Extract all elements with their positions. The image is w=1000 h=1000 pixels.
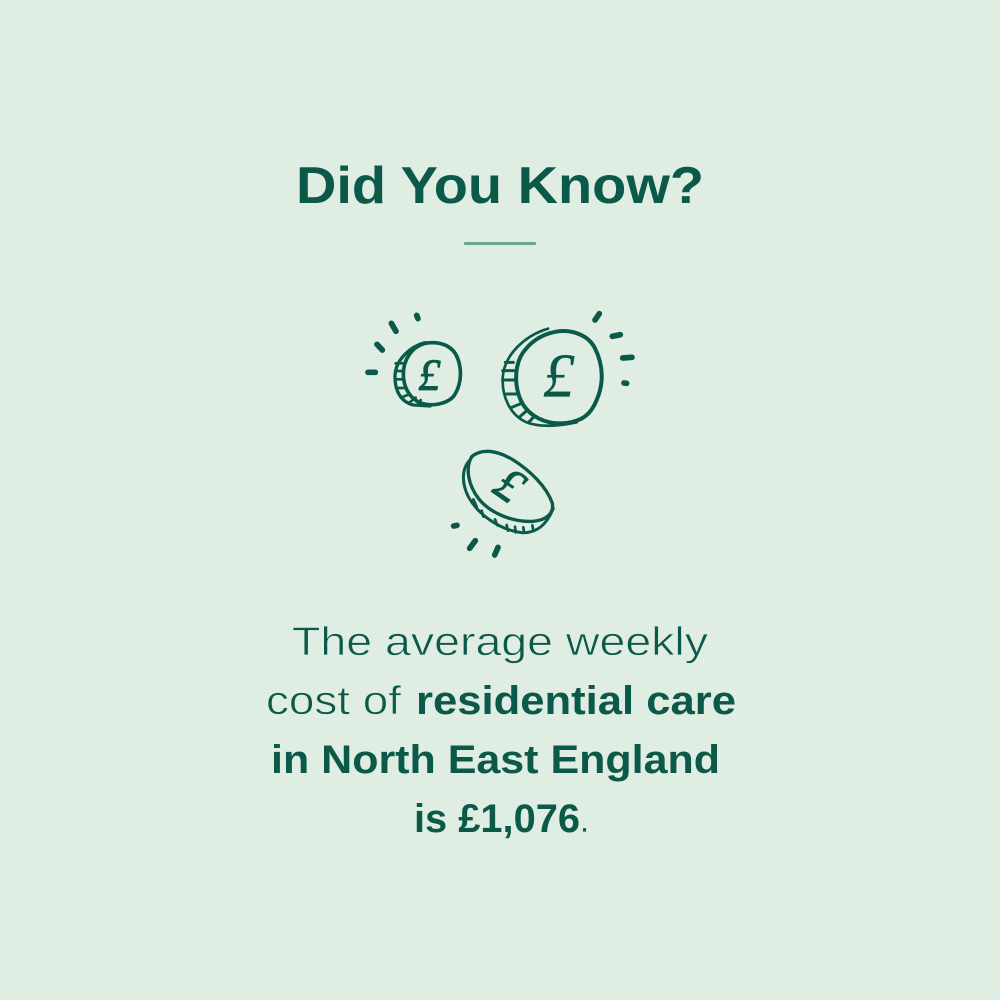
icon: three pound coins	[368, 314, 632, 555]
icon: tilted coin: £	[484, 457, 535, 514]
icon: large coin: £	[543, 341, 575, 411]
text line 3: in North East England	[271, 738, 720, 782]
text line 4: .	[579, 797, 590, 841]
icon: sparkle marks	[368, 314, 632, 555]
icon: small coin	[395, 343, 460, 406]
text line 2	[266, 679, 736, 723]
divider rule	[464, 242, 536, 245]
text line 1: The average weekly	[292, 620, 708, 664]
title: Did You Know?	[296, 157, 704, 215]
text line 2: residential care	[416, 679, 736, 723]
icon: large coin	[503, 329, 602, 426]
text line 2: cost of	[266, 679, 402, 723]
icon: small coin: £	[418, 350, 441, 399]
body text	[266, 620, 736, 841]
text line 4: is £1,076	[414, 797, 580, 841]
icon: tilted coin	[463, 451, 553, 533]
